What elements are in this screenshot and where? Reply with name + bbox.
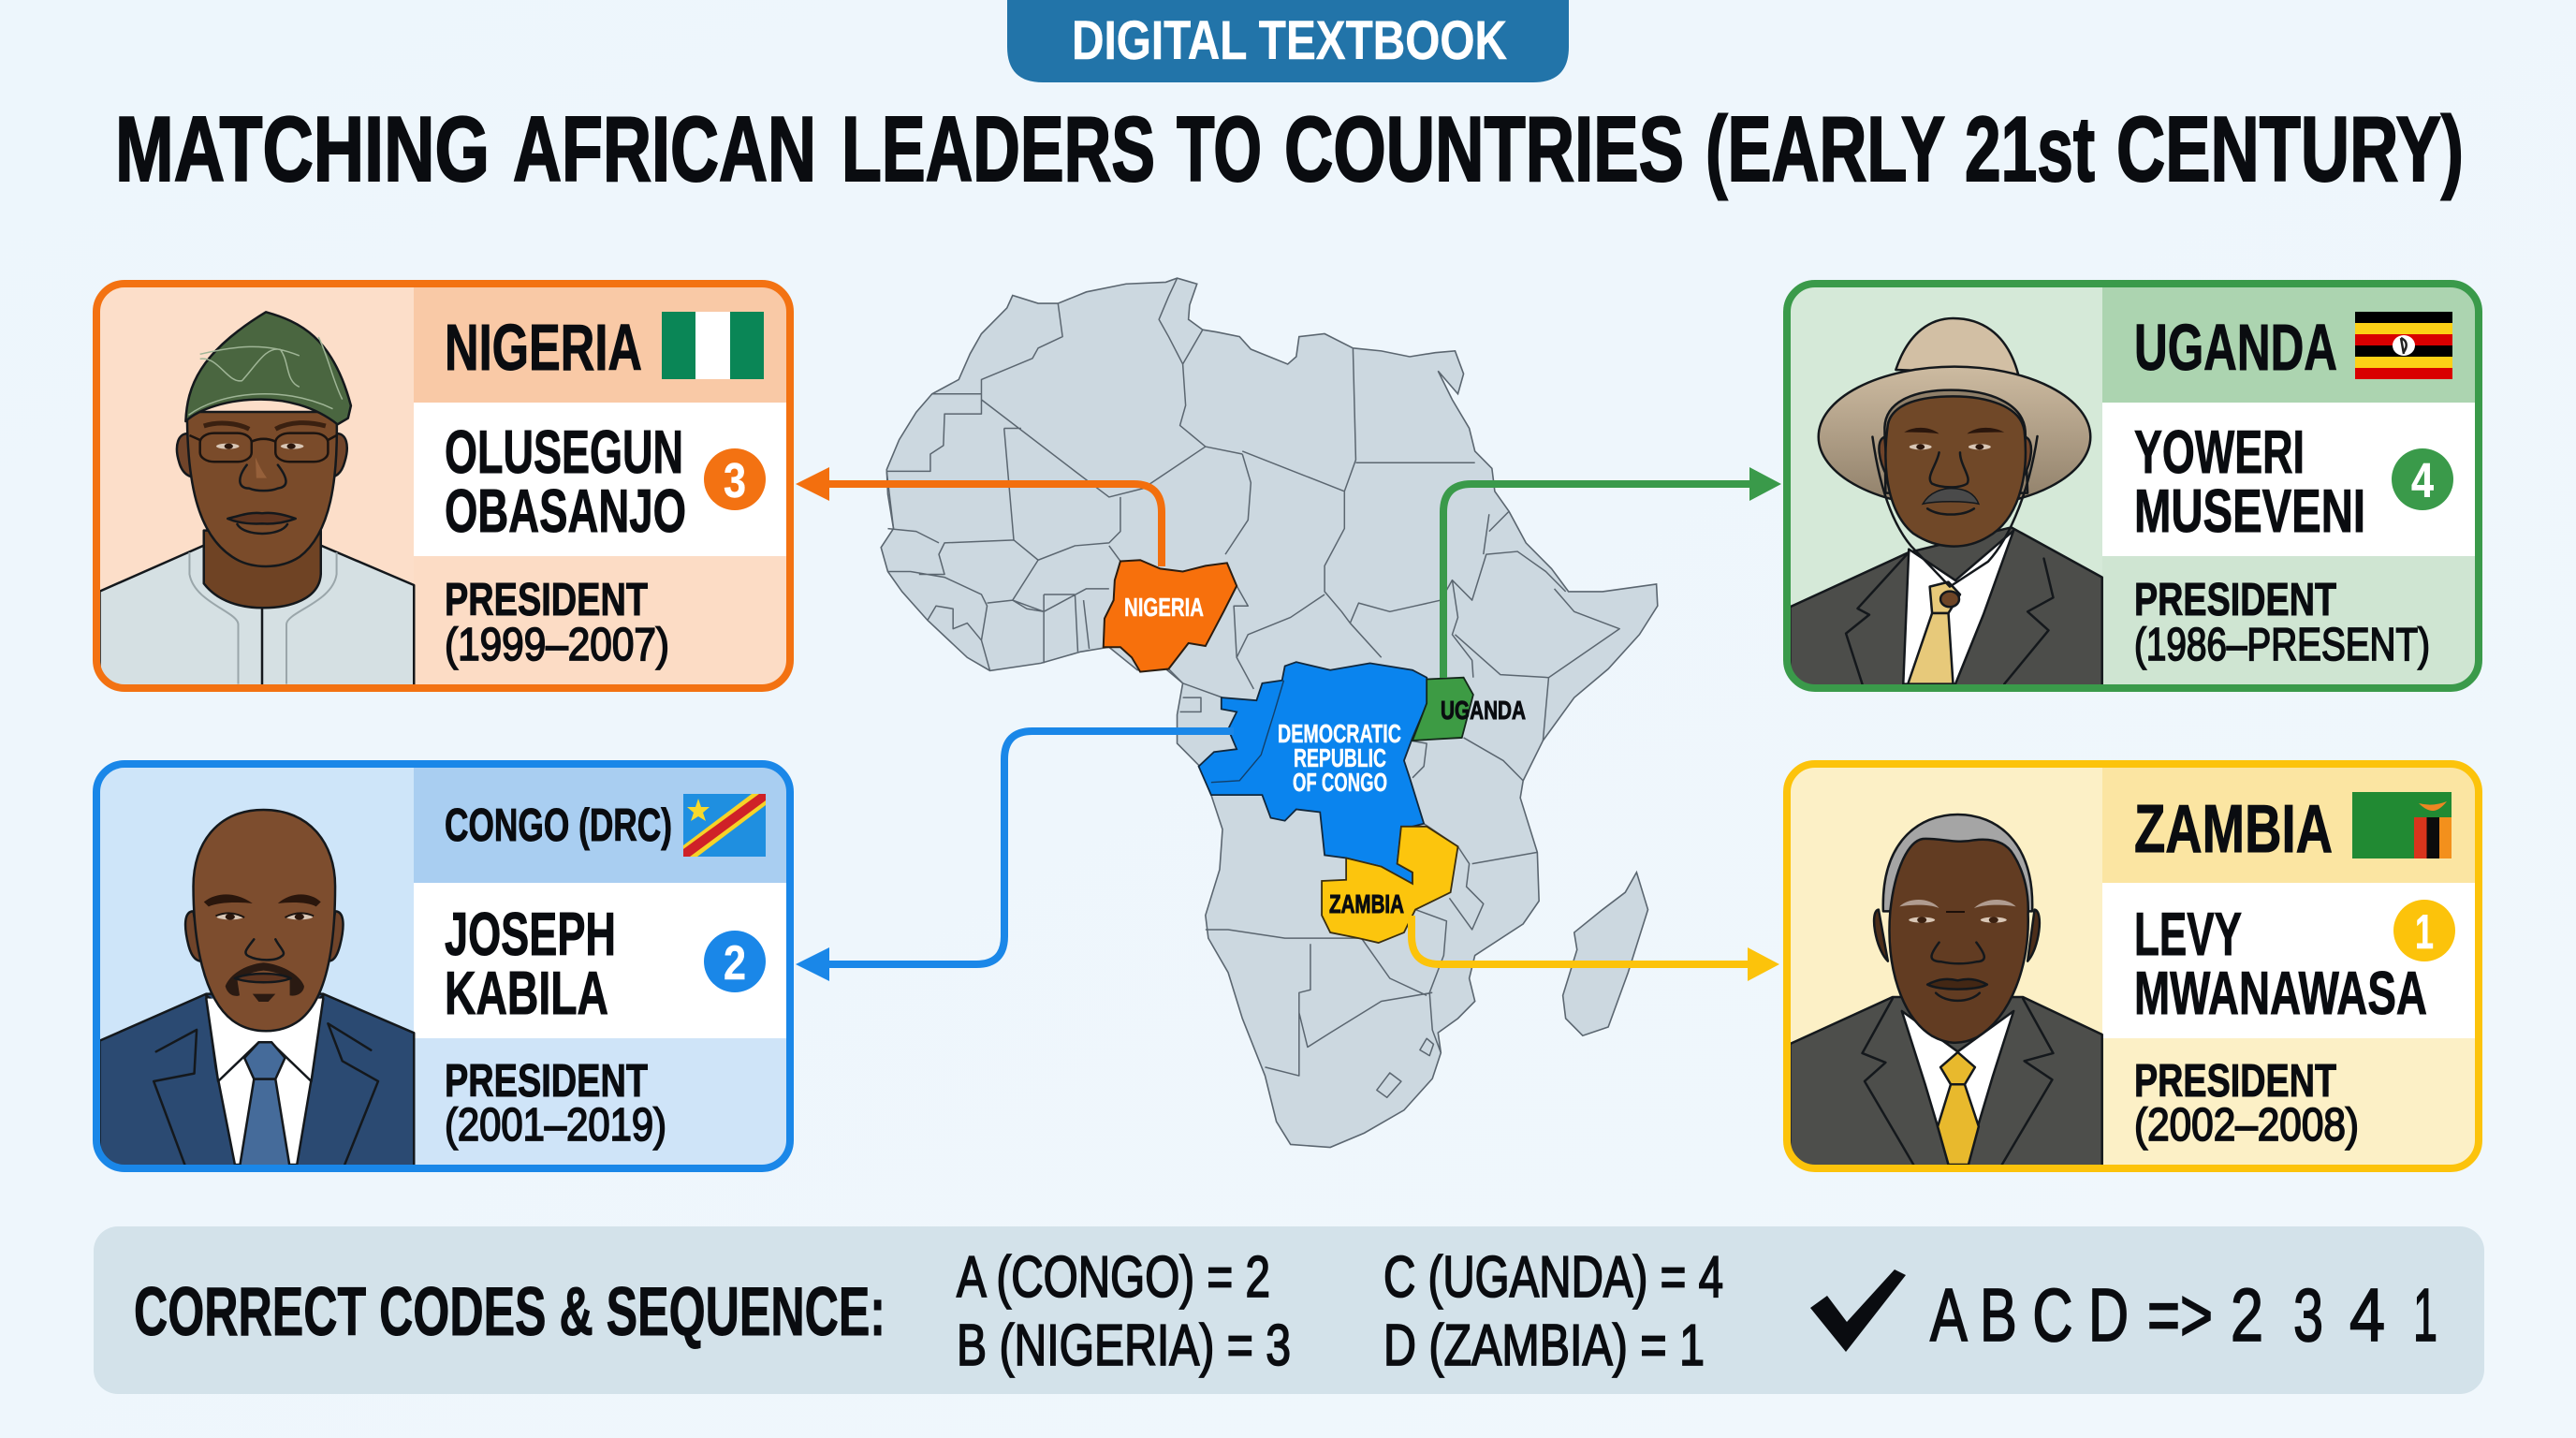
office and term [2134,575,2430,670]
leader name: Levy Mwanawasa: LEVY [2134,900,2242,968]
leader name: Olusegun Obasanjo: OLUSEGUN [445,418,683,486]
flag: Zambia [2352,792,2452,858]
code list: B (NIGERIA) = 3 [957,1313,1291,1378]
code list [957,1245,1723,1378]
leader name: Joseph Kabila: JOSEPH [445,900,616,968]
office and term: (2001–2019) [445,1100,666,1151]
office and term [445,1056,666,1151]
flag: Democratic Republic of Congo [683,794,766,857]
leader name: Joseph Kabila: KABILA [445,959,608,1027]
title: COUNTRIES [1284,97,1684,200]
leader name: Olusegun Obasanjo: OBASANJO [445,477,686,545]
office and term: (1999–2007) [445,620,669,670]
code list: A (CONGO) = 2 [957,1245,1270,1310]
number badge: 2 [704,931,766,992]
heading: correct codes and sequence: CORRECT CODES & SEQUENCE: [134,1274,886,1350]
portrait: Yoweri Museveni [1790,318,2102,686]
leader name: Yoweri Museveni: YOWERI [2134,418,2305,486]
panel: Uganda card [1787,284,2479,688]
connector: Zambia [1412,916,1779,981]
map: country borders [886,278,1619,1097]
code list: C (UGANDA) = 4 [1383,1245,1723,1310]
map: land mass [881,278,1658,1148]
title: TO [1177,97,1262,200]
office and term: PRESIDENT [445,575,648,625]
map label: Democratic Republic of Congo: REPUBLIC [1294,743,1386,772]
map label: Democratic Republic of Congo: DEMOCRATIC [1278,719,1401,748]
portrait: Levy Mwanawasa [1790,814,2102,1167]
answer sequence: 1 [2413,1273,2437,1357]
title: CENTURY) [2116,97,2464,200]
office and term: (2002–2008) [2134,1100,2359,1151]
map: Zambia [1322,827,1458,943]
number badge: 2: 2 [724,936,746,990]
title: (EARLY [1705,97,1945,200]
answer sequence: 4 [2349,1273,2385,1357]
leader name: Levy Mwanawasa: MWANAWASA [2134,959,2427,1027]
flag: Nigeria [662,312,764,379]
leader name: Olusegun Obasanjo [445,418,686,545]
answer sequence: 3 [2293,1273,2323,1357]
title: MATCHING [115,97,490,200]
country: Nigeria: NIGERIA [445,311,642,384]
number badge: 4 [2392,448,2453,510]
answer sequence [1930,1273,2437,1357]
country: Congo (DRC): CONGO (DRC) [445,800,672,851]
panel: Zambia card [1787,764,2479,1168]
country: Uganda: UGANDA [2134,311,2337,384]
map of Africa [881,278,1658,1148]
answer sequence: => [2147,1273,2213,1357]
leader name: Joseph Kabila [445,900,616,1027]
portrait: Joseph Kabila [100,810,414,1167]
number badge: 3: 3 [724,454,746,508]
number badge: 3 [704,448,766,510]
map label: Democratic Republic of Congo: OF CONGO [1293,768,1387,797]
map label: Democratic Republic of Congo [1278,719,1401,797]
icon: check mark [1810,1269,1906,1352]
panel: Nigeria card [96,284,790,688]
header tab: digital textbook [1007,0,1569,82]
panel: Congo card [96,764,790,1168]
map label: Uganda: UGANDA [1441,696,1526,725]
leader name: Levy Mwanawasa [2134,900,2427,1027]
office and term: PRESIDENT [2134,1056,2336,1107]
code list: D (ZAMBIA) = 1 [1383,1313,1705,1378]
office and term [2134,1056,2359,1151]
office and term [445,575,669,670]
country: Zambia: ZAMBIA [2134,792,2333,867]
leader name: Yoweri Museveni: MUSEVENI [2134,477,2365,545]
title: AFRICAN [513,97,816,200]
title [115,97,2464,200]
map label: Zambia: ZAMBIA [1329,889,1404,918]
answer sequence: A B C D [1930,1273,2129,1357]
title: LEADERS [842,97,1155,200]
answer sequence: 2 [2231,1273,2263,1357]
number badge: 1 [2393,900,2455,961]
map: Uganda [1412,678,1473,741]
portrait: Olusegun Obasanjo [100,312,414,686]
leader name: Yoweri Museveni [2134,418,2365,545]
header tab: digital textbook: DIGITAL TEXTBOOK [1072,10,1507,71]
map: Democratic Republic of Congo [1199,662,1429,884]
number badge: 1: 1 [2415,905,2434,960]
flag: Uganda [2355,312,2452,379]
office and term: PRESIDENT [445,1056,648,1107]
number badge: 4: 4 [2411,454,2434,508]
office and term: PRESIDENT [2134,575,2336,625]
title: 21st [1965,97,2095,200]
office and term: (1986–PRESENT) [2134,620,2430,670]
map label: Nigeria: NIGERIA [1124,593,1204,622]
connector: Congo [796,731,1234,981]
map: Madagascar [1563,873,1648,1035]
map: Nigeria [1104,560,1237,672]
connector: Uganda [1443,467,1781,678]
panel: correct codes and sequence bar [94,1226,2484,1394]
connector: Nigeria [796,467,1162,566]
